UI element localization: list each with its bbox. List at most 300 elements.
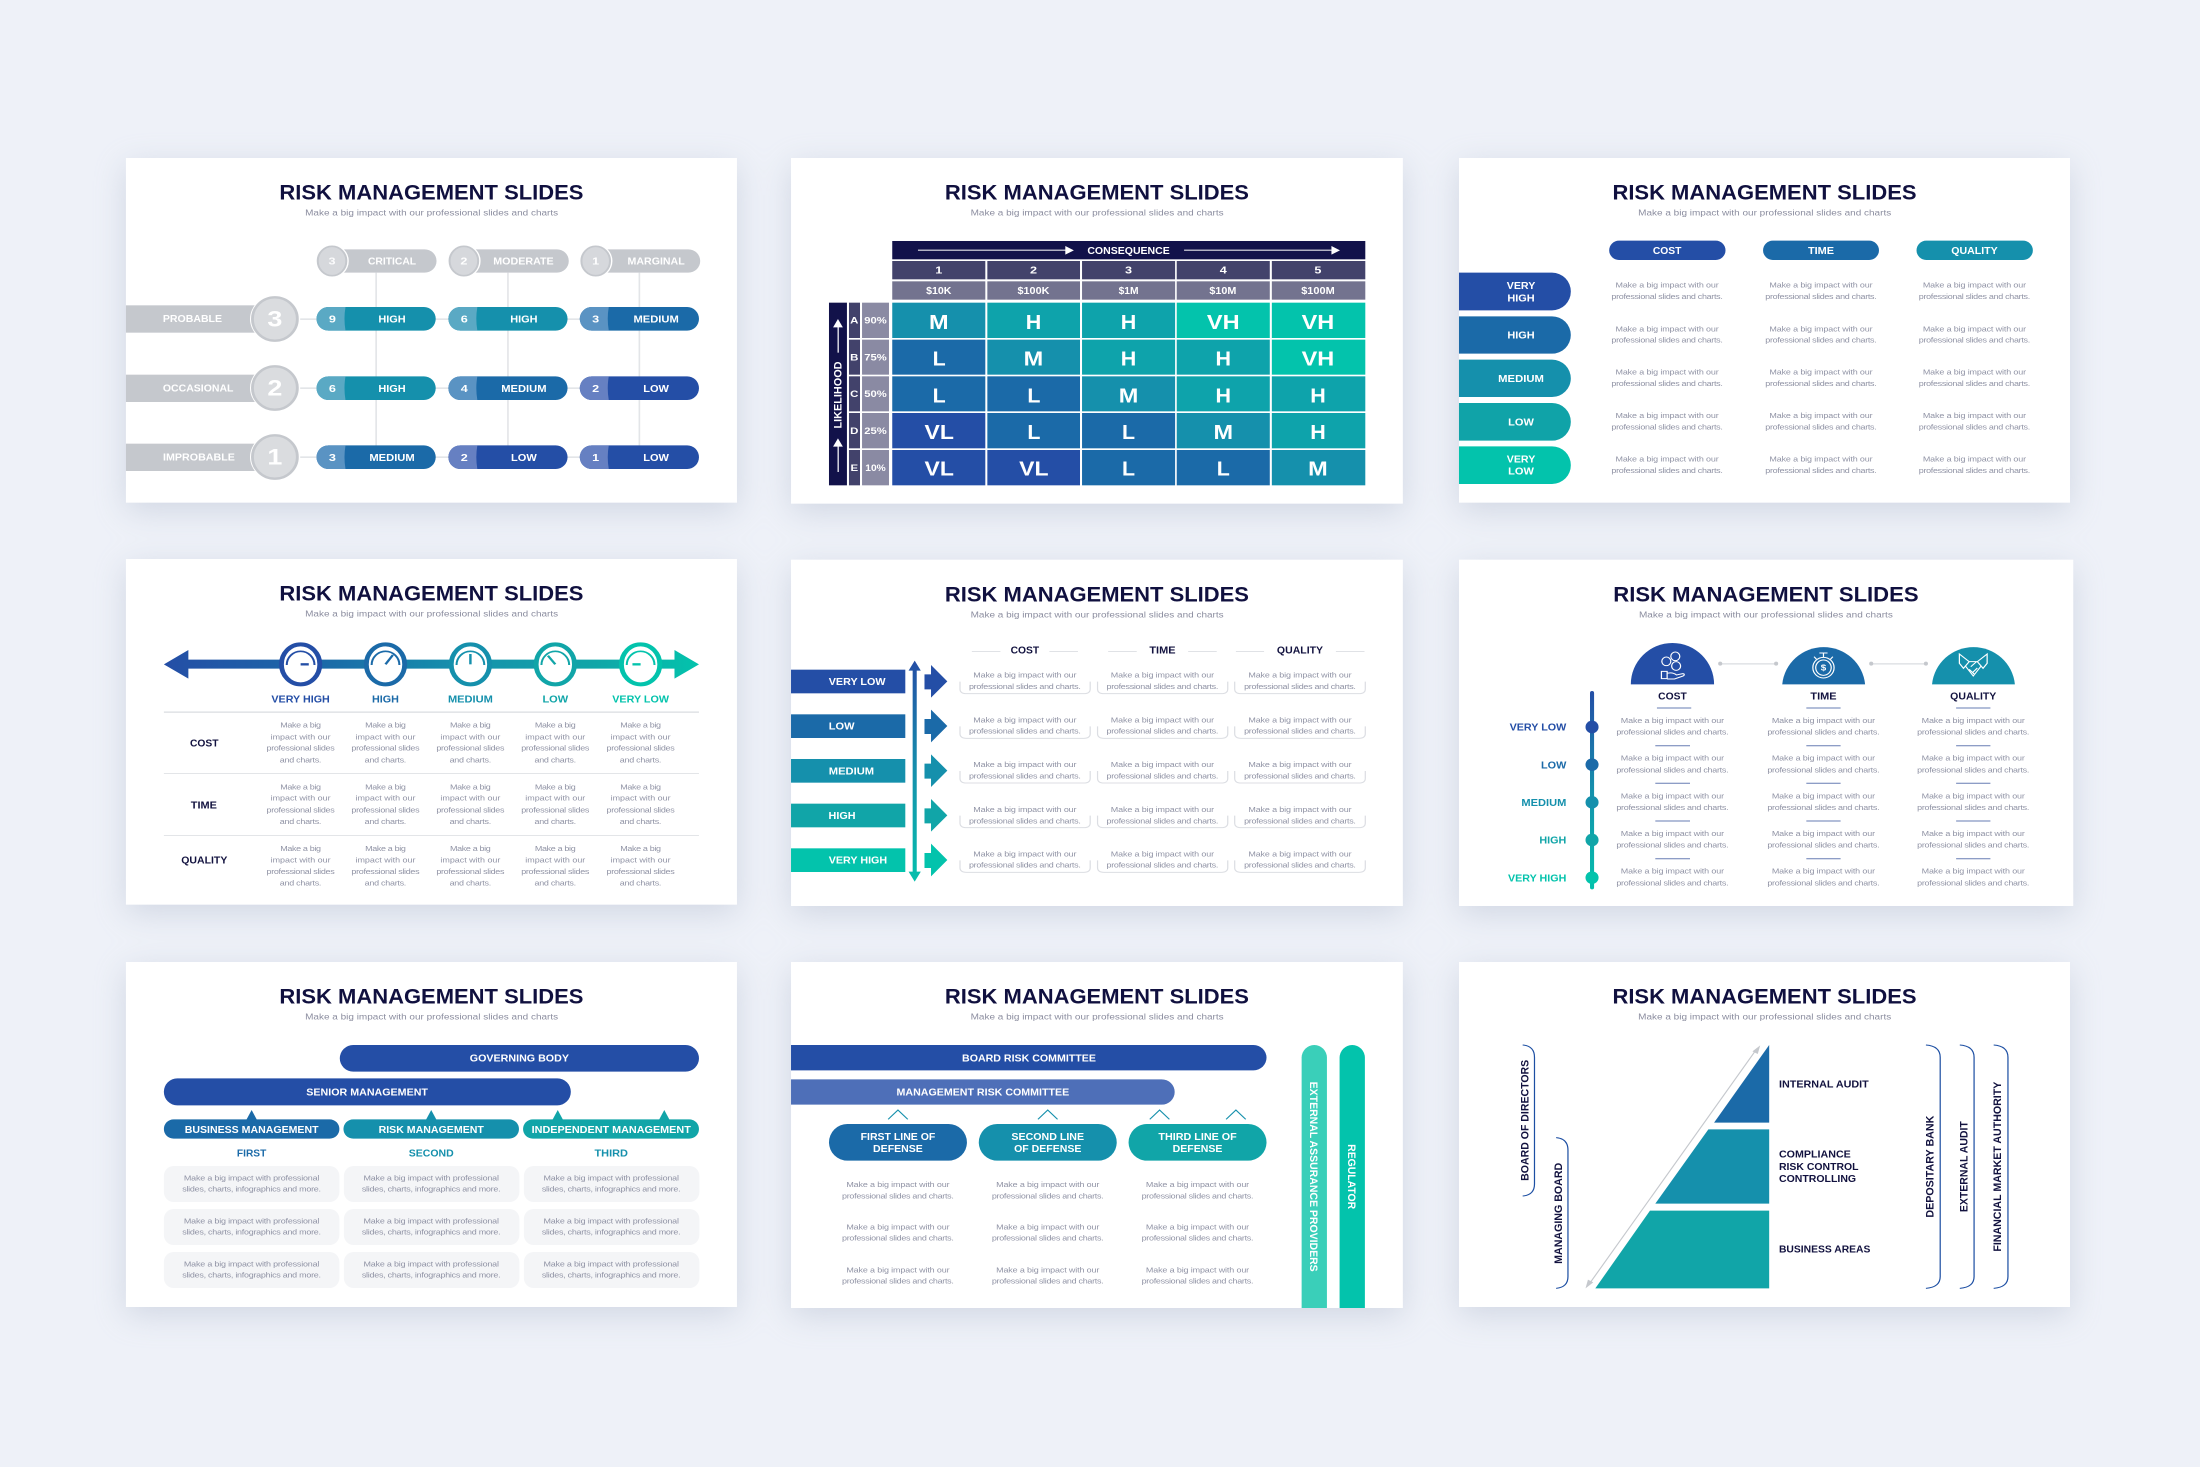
governing body: GOVERNING BODY bbox=[470, 1053, 569, 1064]
row labels: QUALITY bbox=[181, 855, 228, 866]
matrix row B: M bbox=[1024, 348, 1043, 370]
text column: time: professional slides and charts. bbox=[1765, 293, 1877, 301]
header: moderate: MODERATE bbox=[493, 257, 554, 267]
pyramid middle bbox=[1655, 1129, 1769, 1204]
rating pill 2 low: 2 bbox=[461, 453, 468, 464]
matrix row D: L bbox=[1122, 421, 1135, 443]
text column: time: Make a big impact with our bbox=[1111, 850, 1214, 858]
third line of defense: THIRD LINE OF bbox=[1158, 1132, 1237, 1143]
consequence levels: 1 bbox=[935, 265, 943, 276]
tab: very low bbox=[1459, 446, 1571, 484]
text row: time: and charts. bbox=[620, 818, 661, 826]
title: RISK MANAGEMENT SLIDES bbox=[945, 985, 1249, 1009]
text column: third: Make a big impact with our bbox=[1146, 1181, 1249, 1189]
text column: cost: professional slides and charts. bbox=[1611, 380, 1723, 388]
tab: medium: MEDIUM bbox=[1498, 374, 1544, 385]
text column: third: Make a big impact with our bbox=[1146, 1266, 1249, 1274]
text column: time: Make a big impact with our bbox=[1772, 830, 1875, 838]
row label: probable: 3 bbox=[267, 308, 282, 332]
rating pill 6 high bbox=[317, 376, 436, 400]
cards row 3: slides, charts, infographics and more. bbox=[362, 1271, 501, 1279]
level: very low bbox=[791, 665, 947, 698]
text column: cost: professional slides and charts. bbox=[1616, 804, 1729, 812]
matrix row C: H bbox=[1216, 384, 1231, 407]
consequence levels: 5 bbox=[1314, 265, 1322, 276]
text column: quality: Make a big impact with our bbox=[1923, 368, 2026, 376]
gauge labels: MEDIUM bbox=[448, 694, 493, 705]
column labels: FIRST bbox=[237, 1149, 266, 1159]
level: very high: VERY HIGH bbox=[829, 856, 887, 866]
text column: time: professional slides and charts. bbox=[1765, 423, 1877, 431]
text row: time: professional slides bbox=[351, 806, 420, 814]
cards row 3: Make a big impact with professional bbox=[363, 1260, 499, 1268]
tab: very low: VERY bbox=[1507, 454, 1536, 465]
text column: cost: Make a big impact with our bbox=[973, 761, 1077, 769]
text row: cost: Make a big bbox=[450, 721, 491, 729]
column labels: THIRD bbox=[594, 1149, 628, 1159]
compliance labels: COMPLIANCE bbox=[1779, 1150, 1851, 1160]
cards row 3: slides, charts, infographics and more. bbox=[182, 1271, 321, 1279]
cards row 3: slides, charts, infographics and more. bbox=[542, 1271, 681, 1279]
text row: cost: and charts. bbox=[620, 756, 661, 764]
pyramid top bbox=[1714, 1045, 1769, 1123]
text column: cost: Make a big impact with our bbox=[1616, 281, 1719, 289]
scale labels: VERY LOW bbox=[1510, 723, 1566, 733]
text row: time: impact with our bbox=[356, 794, 416, 802]
tab: high bbox=[1459, 316, 1571, 354]
matrix row D: H bbox=[1310, 421, 1326, 443]
text row: time: impact with our bbox=[525, 794, 586, 802]
header: marginal: MARGINAL bbox=[628, 257, 685, 267]
matrix row D: L bbox=[1027, 421, 1040, 443]
text column: time: professional slides and charts. bbox=[1107, 683, 1218, 691]
header: critical: CRITICAL bbox=[368, 257, 416, 267]
text row: cost: and charts. bbox=[280, 756, 321, 764]
consequence amounts: $1M bbox=[1119, 286, 1139, 297]
text column: quality: Make a big impact with our bbox=[1923, 412, 2026, 420]
slide 8: lines of defense bbox=[791, 962, 1403, 1308]
text column: time: Make a big impact with our bbox=[1111, 761, 1214, 769]
matrix row C bbox=[849, 376, 1365, 411]
text column: time: Make a big impact with our bbox=[1111, 671, 1214, 679]
matrix row A: A bbox=[850, 317, 859, 326]
title: RISK MANAGEMENT SLIDES bbox=[279, 985, 583, 1009]
subtitle: Make a big impact with our professional slides and charts bbox=[305, 1012, 558, 1022]
level: very low: VERY LOW bbox=[829, 677, 886, 688]
subtitle: Make a big impact with our professional slides and charts bbox=[1638, 208, 1891, 218]
column headings bbox=[1658, 691, 1997, 702]
cards row 2: slides, charts, infographics and more. bbox=[362, 1228, 501, 1236]
level: medium bbox=[791, 754, 947, 787]
text column: time: professional slides and charts. bbox=[1767, 728, 1880, 736]
text column: third bbox=[1142, 1181, 1253, 1285]
column headers bbox=[972, 646, 1364, 656]
row label: probable bbox=[126, 295, 300, 343]
matrix row D: D bbox=[850, 427, 859, 437]
text column: second: professional slides and charts. bbox=[992, 1277, 1104, 1285]
text row: cost: and charts. bbox=[450, 756, 491, 764]
text row: time bbox=[267, 783, 675, 826]
column headers: TIME bbox=[1149, 646, 1176, 656]
text column: time: Make a big impact with our bbox=[1111, 716, 1214, 724]
matrix row B: B bbox=[850, 353, 859, 363]
rating pill 1 low: 1 bbox=[592, 453, 600, 464]
text column: quality: professional slides and charts. bbox=[1919, 336, 2030, 344]
header pills bbox=[1609, 241, 2033, 260]
second line of defense: OF DEFENSE bbox=[1014, 1144, 1082, 1155]
text row: cost: professional slides bbox=[351, 744, 420, 752]
independent management bbox=[523, 1110, 699, 1139]
text row: quality: Make a big bbox=[535, 845, 576, 853]
text row: quality: impact with our bbox=[611, 856, 671, 864]
rating pill 6 high: HIGH bbox=[510, 315, 538, 325]
subtitle: Make a big impact with our professional slides and charts bbox=[971, 1012, 1224, 1022]
third line of defense: DEFENSE bbox=[1173, 1144, 1223, 1155]
text column: cost: Make a big impact with our bbox=[1616, 325, 1719, 333]
matrix row A: 90% bbox=[864, 317, 887, 326]
text column: time: Make a big impact with our bbox=[1772, 867, 1875, 875]
text column: quality: Make a big impact with our bbox=[1922, 867, 2025, 875]
text row: cost: impact with our bbox=[611, 733, 671, 741]
text row: quality: and charts. bbox=[450, 879, 491, 887]
text column: time: professional slides and charts. bbox=[1765, 467, 1877, 475]
text column: third: Make a big impact with our bbox=[1146, 1223, 1249, 1231]
third line of defense bbox=[1129, 1124, 1267, 1161]
text column: quality: professional slides and charts. bbox=[1919, 467, 2030, 475]
text column: time: Make a big impact with our bbox=[1111, 806, 1214, 814]
matrix row E bbox=[849, 450, 1365, 485]
consequence levels: 2 bbox=[1030, 265, 1037, 276]
tab: very high: HIGH bbox=[1507, 293, 1535, 304]
rating pill 9 high bbox=[317, 307, 436, 331]
header: critical bbox=[315, 244, 437, 278]
matrix row A bbox=[849, 303, 1365, 338]
matrix row A: H bbox=[1026, 311, 1041, 333]
text row: cost: professional slides bbox=[267, 744, 335, 752]
bracket: external audit: EXTERNAL AUDIT bbox=[1959, 1121, 1971, 1212]
row label: improbable: IMPROBABLE bbox=[163, 452, 235, 463]
text row: cost: impact with our bbox=[525, 733, 586, 741]
vertical double arrow bbox=[909, 661, 921, 882]
matrix row A: VH bbox=[1302, 311, 1334, 333]
title: RISK MANAGEMENT SLIDES bbox=[1612, 985, 1917, 1009]
text row: quality: professional slides bbox=[607, 868, 675, 876]
text column: cost: Make a big impact with our bbox=[1616, 412, 1719, 420]
gauge: high bbox=[366, 644, 405, 684]
cards row 1: Make a big impact with professional bbox=[543, 1174, 679, 1182]
text column: first: Make a big impact with our bbox=[846, 1223, 950, 1231]
second line of defense bbox=[979, 1124, 1117, 1161]
senior management: SENIOR MANAGEMENT bbox=[306, 1087, 428, 1098]
text row: quality: Make a big bbox=[450, 845, 491, 853]
text row: time: impact with our bbox=[271, 794, 331, 802]
slide 2: consequence likelihood matrix bbox=[791, 158, 1403, 504]
text row: quality: impact with our bbox=[271, 856, 331, 864]
text column: quality: professional slides and charts. bbox=[1917, 879, 2029, 887]
cards row 2: slides, charts, infographics and more. bbox=[542, 1228, 681, 1236]
text row: cost: Make a big bbox=[280, 721, 321, 729]
gauge: low bbox=[536, 644, 574, 684]
bracket: external audit bbox=[1959, 1045, 1974, 1288]
text column: third: professional slides and charts. bbox=[1142, 1277, 1253, 1285]
text column: time: Make a big impact with our bbox=[1769, 412, 1873, 420]
scale labels: LOW bbox=[1541, 760, 1566, 771]
rating pill 6 high: 6 bbox=[329, 384, 336, 395]
matrix row E: L bbox=[1122, 457, 1135, 480]
subtitle: Make a big impact with our professional slides and charts bbox=[1639, 610, 1893, 620]
text row: cost: impact with our bbox=[356, 733, 416, 741]
text row: time: Make a big bbox=[365, 783, 406, 791]
tab: low: LOW bbox=[1508, 417, 1534, 428]
rating pill 3 medium: 3 bbox=[329, 453, 336, 464]
row label: occasional: OCCASIONAL bbox=[163, 383, 233, 394]
text column: time: professional slides and charts. bbox=[1765, 336, 1877, 344]
text row: time: Make a big bbox=[280, 783, 321, 791]
matrix row B: H bbox=[1121, 348, 1136, 370]
gauge labels: VERY LOW bbox=[612, 694, 669, 705]
text column: cost: Make a big impact with our bbox=[1621, 754, 1724, 762]
text row: time: and charts. bbox=[534, 818, 576, 826]
text column: quality: Make a big impact with our bbox=[1248, 850, 1352, 858]
cards row 2: slides, charts, infographics and more. bbox=[182, 1228, 321, 1236]
matrix row B: 75% bbox=[864, 353, 887, 363]
text column: quality bbox=[1917, 717, 2029, 887]
level: very high bbox=[791, 844, 947, 876]
row label: occasional: 2 bbox=[267, 377, 282, 401]
header: marginal bbox=[579, 244, 700, 278]
first line of defense bbox=[829, 1124, 967, 1161]
text column: second: Make a big impact with our bbox=[996, 1223, 1100, 1231]
text column: quality: Make a big impact with our bbox=[1248, 806, 1352, 814]
title: RISK MANAGEMENT SLIDES bbox=[1613, 583, 1919, 607]
text column: first: Make a big impact with our bbox=[846, 1181, 950, 1189]
subtitle: Make a big impact with our professional slides and charts bbox=[971, 610, 1224, 620]
header pills: COST bbox=[1653, 246, 1681, 257]
text column: cost: Make a big impact with our bbox=[1616, 455, 1719, 463]
text column: time: professional slides and charts. bbox=[1107, 817, 1218, 825]
text row: time: and charts. bbox=[365, 818, 406, 826]
likelihood bar: LIKELIHOOD bbox=[833, 361, 845, 428]
text column: time: professional slides and charts. bbox=[1767, 804, 1880, 812]
slide shadows bbox=[126, 166, 2073, 1316]
text row: quality: professional slides bbox=[521, 868, 589, 876]
consequence levels bbox=[892, 261, 1365, 279]
text column: cost: professional slides and charts. bbox=[1611, 423, 1723, 431]
text column: quality: professional slides and charts. bbox=[1244, 683, 1356, 691]
text column: second: Make a big impact with our bbox=[996, 1266, 1100, 1274]
text row: quality: professional slides bbox=[436, 868, 504, 876]
cards row 1: Make a big impact with professional bbox=[363, 1174, 499, 1182]
text row: time: Make a big bbox=[450, 783, 491, 791]
text column: cost: Make a big impact with our bbox=[1621, 867, 1724, 875]
column headings: COST bbox=[1658, 691, 1687, 702]
rating pill 1 low bbox=[580, 445, 699, 469]
matrix row B: L bbox=[933, 348, 946, 370]
text column: third: professional slides and charts. bbox=[1142, 1192, 1253, 1200]
text column: quality: Make a big impact with our bbox=[1922, 830, 2025, 838]
rating pill 3 medium: MEDIUM bbox=[369, 453, 415, 464]
text column: quality: professional slides and charts. bbox=[1244, 861, 1356, 869]
text column: cost: professional slides and charts. bbox=[1616, 728, 1729, 736]
consequence levels: 3 bbox=[1125, 265, 1132, 276]
dome: time with stopwatch icon bbox=[1782, 647, 1865, 684]
text row: cost: and charts. bbox=[365, 756, 406, 764]
cards row 2: Make a big impact with professional bbox=[363, 1217, 499, 1225]
text column: quality: Make a big impact with our bbox=[1923, 325, 2026, 333]
row label: improbable bbox=[126, 433, 300, 481]
cards row 1: slides, charts, infographics and more. bbox=[182, 1185, 321, 1193]
text column: first: professional slides and charts. bbox=[842, 1277, 954, 1285]
text row: quality: and charts. bbox=[280, 879, 321, 887]
text row: time: and charts. bbox=[280, 818, 321, 826]
matrix row B bbox=[849, 340, 1365, 375]
internal audit label: INTERNAL AUDIT bbox=[1779, 1079, 1869, 1090]
subtitle: Make a big impact with our professional slides and charts bbox=[305, 609, 558, 619]
title: RISK MANAGEMENT SLIDES bbox=[279, 181, 583, 205]
rating pill 4 medium: 4 bbox=[461, 384, 468, 395]
bracket: depositary bank: DEPOSITARY BANK bbox=[1924, 1115, 1936, 1218]
matrix row C: L bbox=[933, 384, 946, 407]
header: moderate bbox=[447, 244, 569, 278]
text column: time bbox=[1107, 671, 1218, 869]
text column: time: Make a big impact with our bbox=[1769, 325, 1873, 333]
text column: time: professional slides and charts. bbox=[1767, 766, 1880, 774]
level: medium: MEDIUM bbox=[829, 766, 874, 777]
header: moderate: 2 bbox=[460, 257, 467, 267]
text column: time: professional slides and charts. bbox=[1107, 861, 1218, 869]
management risk committee bbox=[791, 1079, 1175, 1105]
text row: quality: Make a big bbox=[620, 845, 661, 853]
text row: cost: Make a big bbox=[620, 721, 661, 729]
text column: time: Make a big impact with our bbox=[1772, 717, 1875, 725]
matrix row E: E bbox=[850, 464, 858, 474]
rating pill 9 high: HIGH bbox=[378, 315, 406, 325]
text row: quality: Make a big bbox=[365, 845, 406, 853]
gauge labels: HIGH bbox=[372, 694, 399, 705]
text column: quality: professional slides and charts. bbox=[1244, 772, 1356, 780]
text column: cost: Make a big impact with our bbox=[1621, 792, 1724, 800]
text row: cost: impact with our bbox=[440, 733, 501, 741]
external assurance providers bar: EXTERNAL ASSURANCE PROVIDERS bbox=[1307, 1082, 1319, 1272]
column headings: TIME bbox=[1810, 691, 1837, 702]
title: RISK MANAGEMENT SLIDES bbox=[945, 583, 1249, 607]
text column: quality: Make a big impact with our bbox=[1248, 716, 1352, 724]
text column: quality: professional slides and charts. bbox=[1244, 727, 1356, 735]
cards row 3 bbox=[164, 1252, 699, 1288]
tab: medium bbox=[1459, 360, 1571, 397]
level: low bbox=[791, 710, 947, 742]
text column: second bbox=[992, 1181, 1104, 1285]
text column: cost bbox=[1611, 281, 1723, 475]
matrix row E: L bbox=[1217, 457, 1230, 480]
consequence levels: 4 bbox=[1220, 265, 1227, 276]
pyramid bottom bbox=[1595, 1211, 1769, 1288]
gauge: very high bbox=[281, 644, 320, 684]
text column: cost: Make a big impact with our bbox=[1621, 830, 1724, 838]
bracket: managing board: MANAGING BOARD bbox=[1553, 1163, 1565, 1264]
compliance labels: RISK CONTROL bbox=[1779, 1162, 1859, 1173]
level: high: HIGH bbox=[829, 811, 856, 822]
level: high bbox=[791, 799, 947, 832]
double arrow along slope bbox=[1586, 1045, 1760, 1288]
cards row 3: Make a big impact with professional bbox=[543, 1260, 679, 1268]
header pills: TIME bbox=[1808, 246, 1834, 257]
text column: time: professional slides and charts. bbox=[1107, 772, 1218, 780]
text row: cost: and charts. bbox=[534, 756, 576, 764]
business management bbox=[164, 1110, 339, 1139]
text column: cost: professional slides and charts. bbox=[969, 861, 1081, 869]
consequence amounts: $10K bbox=[926, 286, 952, 297]
matrix row C: H bbox=[1310, 384, 1326, 407]
text column: quality: professional slides and charts. bbox=[1919, 380, 2030, 388]
slide 1: risk rating connectors bbox=[126, 158, 737, 503]
cards row 2: Make a big impact with professional bbox=[543, 1217, 679, 1225]
text column: quality bbox=[1244, 671, 1356, 869]
matrix row A: M bbox=[929, 311, 949, 333]
text row: time: professional slides bbox=[267, 806, 335, 814]
cards row 2 bbox=[164, 1209, 699, 1245]
regulator bar bbox=[1340, 1045, 1365, 1308]
bracket: board of directors: BOARD OF DIRECTORS bbox=[1519, 1060, 1531, 1181]
slide 4: gauge timeline table bbox=[126, 559, 737, 905]
matrix row C: C bbox=[850, 390, 859, 400]
text column: time bbox=[1765, 281, 1877, 475]
vertical scale bbox=[1586, 691, 1599, 889]
header: critical: 3 bbox=[329, 257, 336, 267]
column headers: COST bbox=[1011, 646, 1039, 656]
text column: cost: professional slides and charts. bbox=[1616, 841, 1729, 849]
dome: quality with handshake icon bbox=[1932, 647, 2015, 684]
text column: quality: professional slides and charts. bbox=[1917, 841, 2029, 849]
text column: cost: Make a big impact with our bbox=[1621, 717, 1724, 725]
text row: time: impact with our bbox=[440, 794, 501, 802]
dome: time with stopwatch icon: $ bbox=[1821, 664, 1826, 672]
text row: cost: professional slides bbox=[521, 744, 589, 752]
rating pill 6 high: HIGH bbox=[378, 384, 406, 395]
rating pill 2 low: 2 bbox=[592, 384, 599, 395]
text column: quality: professional slides and charts. bbox=[1917, 728, 2029, 736]
rating pill 3 medium bbox=[317, 445, 436, 469]
risk management bbox=[343, 1110, 519, 1139]
text row: quality: and charts. bbox=[620, 879, 661, 887]
text column: first: professional slides and charts. bbox=[842, 1234, 954, 1242]
column headers: QUALITY bbox=[1277, 646, 1323, 656]
row label: occasional bbox=[126, 364, 300, 412]
row labels: TIME bbox=[191, 800, 217, 811]
text row: quality: impact with our bbox=[440, 856, 501, 864]
tab: very low: LOW bbox=[1508, 467, 1534, 477]
header: marginal: 1 bbox=[592, 257, 600, 267]
text column: quality: professional slides and charts. bbox=[1919, 423, 2030, 431]
tab: low bbox=[1459, 403, 1571, 441]
text row: time: professional slides bbox=[436, 806, 504, 814]
tab: very high bbox=[1459, 273, 1571, 310]
text column: time: professional slides and charts. bbox=[1767, 879, 1880, 887]
bracket: financial market authority bbox=[1992, 1045, 2008, 1288]
first line of defense: FIRST LINE OF bbox=[861, 1132, 935, 1143]
bracket cells bbox=[960, 682, 1365, 872]
text row: time: Make a big bbox=[620, 783, 661, 791]
rating pill 2 low: LOW bbox=[511, 453, 537, 464]
independent management: INDEPENDENT MANAGEMENT bbox=[532, 1125, 691, 1136]
gauge: very low bbox=[621, 644, 660, 684]
slide 6: domes with icons and scale bbox=[1459, 560, 2073, 906]
rating pill 2 low bbox=[580, 376, 699, 400]
likelihood bar bbox=[829, 303, 847, 485]
matrix row B: H bbox=[1216, 348, 1231, 370]
text column: time: Make a big impact with our bbox=[1769, 281, 1873, 289]
text row: quality: Make a big bbox=[280, 845, 321, 853]
